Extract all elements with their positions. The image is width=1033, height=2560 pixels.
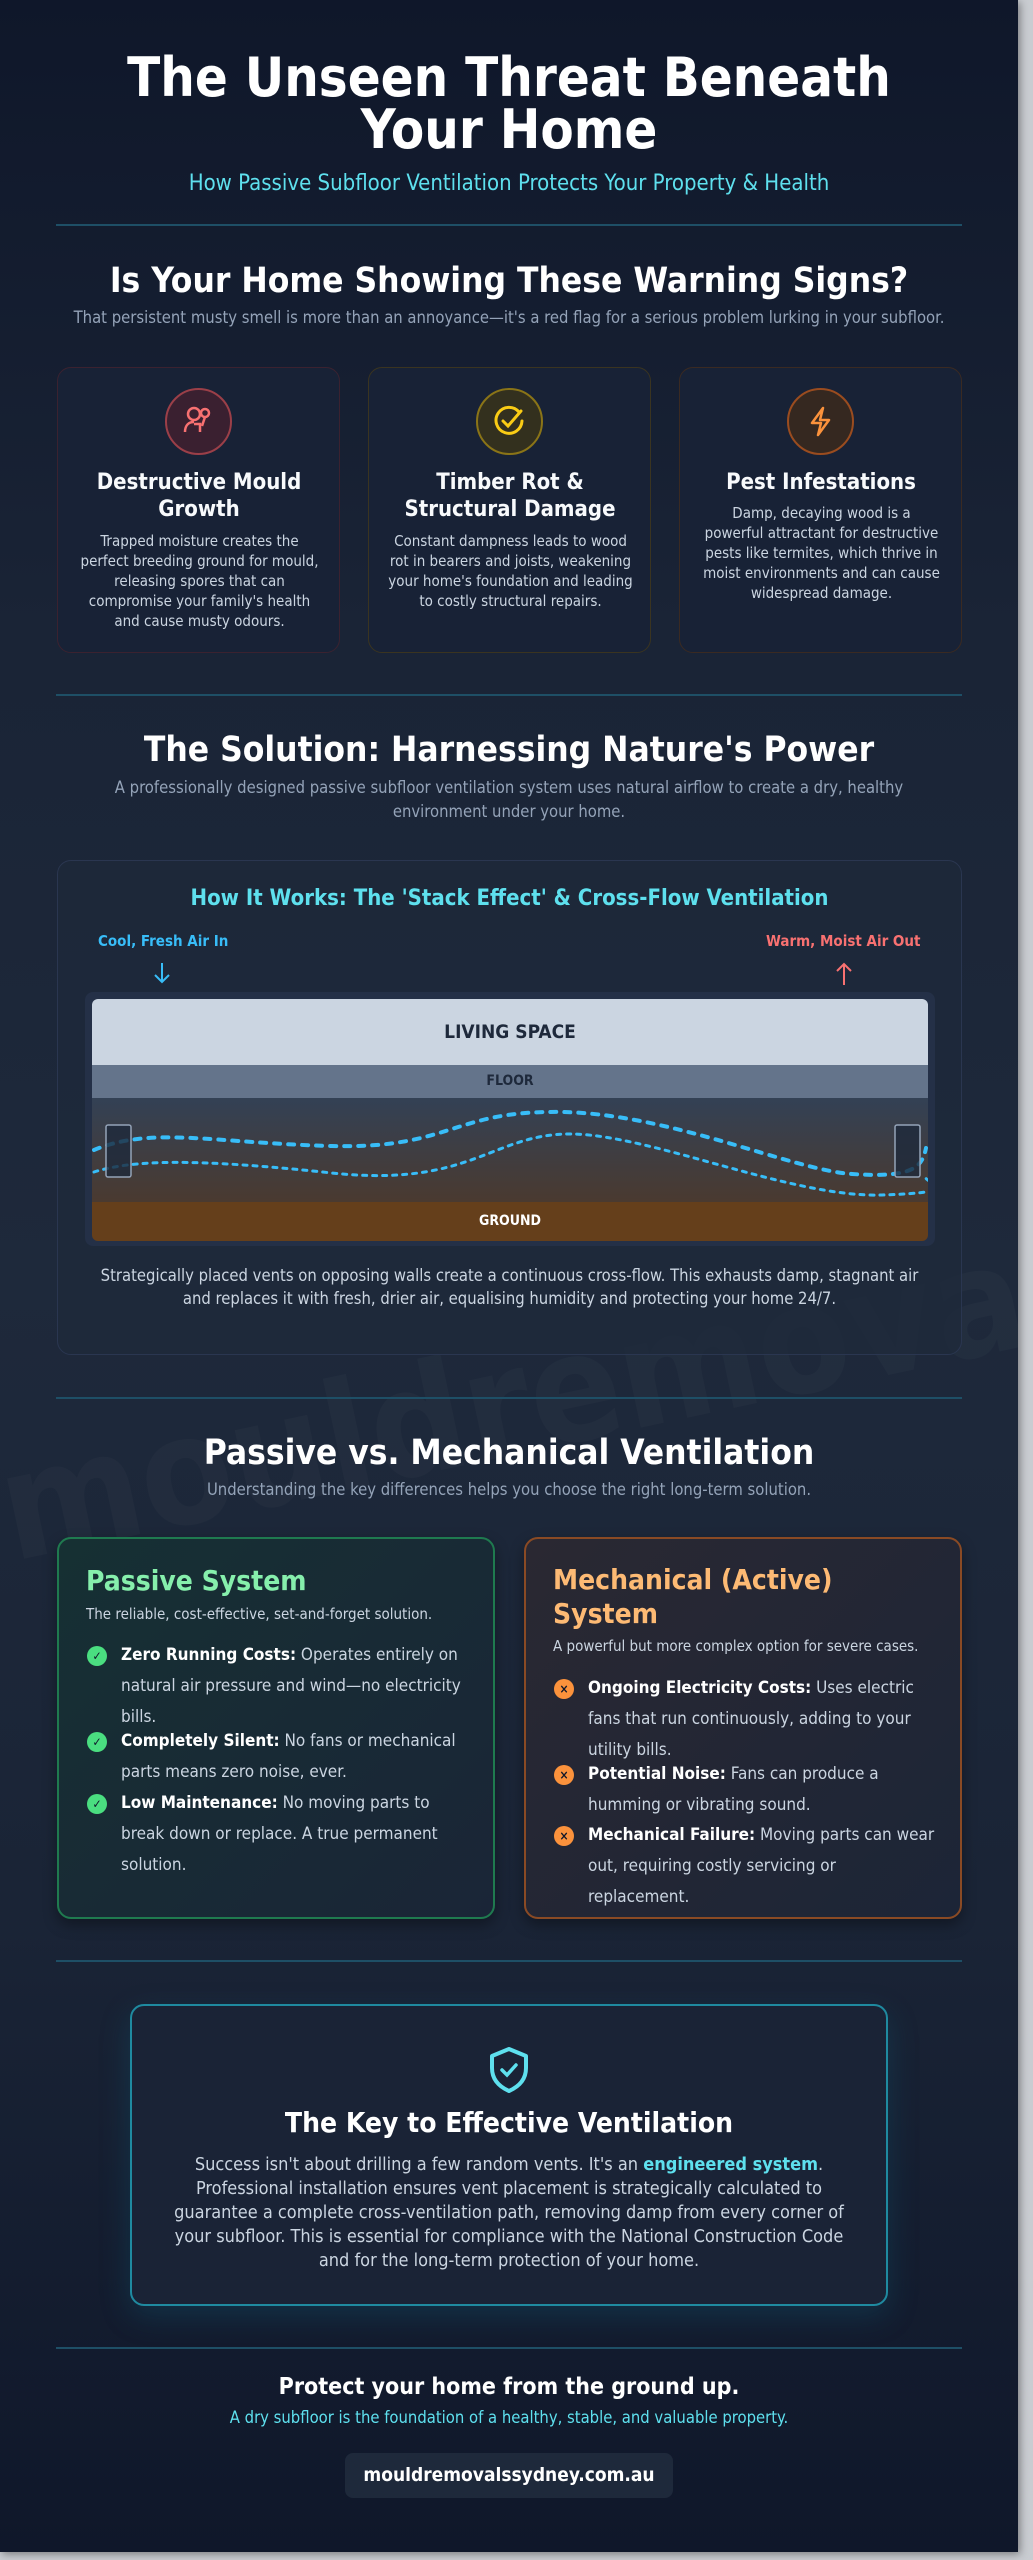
panel: passive [57, 1537, 495, 1919]
list item: ✓ [92, 1797, 102, 1811]
icon: check [476, 388, 543, 455]
text: Success isn't about drilling a few random vents. It's an engineered system. Professional installation ensures vent placement is strategically calculated to guarantee a complete cross-ventilation path, removing damp from every corner of your subfloor. This is essential for compliance with the National Construction Code and for the long-term protection of your home. [174, 2154, 844, 2271]
list item: Potential Noise: Fans can produce a humming or vibrating sound. [588, 1764, 879, 1815]
list item: Completely Silent: No fans or mechanical parts means zero noise, ever. [121, 1731, 456, 1782]
icon: bolt [787, 388, 854, 455]
heading: Timber Rot & Structural Damage [404, 470, 616, 522]
title: The Unseen Threat Beneath [127, 46, 891, 109]
subfloor [92, 1098, 928, 1202]
label: warm air out: Warm, Moist Air Out [766, 932, 920, 950]
floor [92, 1065, 928, 1098]
heading: Passive System [86, 1564, 307, 1597]
heading: Destructive Mould Growth [97, 470, 301, 522]
solution intro: A professionally designed passive subfloor ventilation system uses natural airflow to create a dry, healthy environment under your home. [115, 778, 903, 821]
footer url button [345, 2453, 673, 2498]
panel: key to effective ventilation [130, 2004, 888, 2306]
text: Damp, decaying wood is a powerful attractant for destructive pests like termites, which thrive in moist environments and can cause widespread damage. [703, 504, 940, 602]
ground: GROUND [479, 1213, 541, 1229]
heading: Mechanical (Active) System [553, 1563, 833, 1630]
floor: FLOOR [486, 1073, 534, 1089]
icon: mould [165, 388, 232, 455]
panel: mechanical [524, 1537, 962, 1919]
heading: passive vs mechanical: Passive vs. Mechanical Ventilation [204, 1433, 814, 1473]
subtitle: A powerful but more complex option for severe cases. [553, 1637, 918, 1655]
list item: ✓ [92, 1649, 102, 1663]
description: Strategically placed vents on opposing walls create a continuous cross-flow. This exhausts damp, stagnant air and replaces it with fresh, drier air, equalising humidity and protecting your home 24/7. [101, 1266, 918, 1308]
heading: How It Works: The 'Stack Effect' & Cross-Flow Ventilation [190, 886, 828, 911]
list item: × [559, 1829, 569, 1843]
card: mould [57, 367, 340, 653]
intro text: That persistent musty smell is more than an annoyance—it's a red flag for a serious problem lurking in your subfloor. [74, 308, 944, 327]
text: Constant dampness leads to wood rot in bearers and joists, weakening your home's foundation and leading to costly structural repairs. [388, 532, 633, 610]
list item: Ongoing Electricity Costs: Uses electric fans that run continuously, adding to your utility bills. [588, 1678, 914, 1760]
living space [92, 999, 928, 1065]
list item: × [559, 1768, 569, 1782]
arrow down [154, 963, 170, 984]
text: Trapped moisture creates the perfect breeding ground for mould, releasing spores that can compromise your family's health and cause musty odours. [80, 532, 318, 630]
heading: The Key to Effective Ventilation [285, 2106, 733, 2139]
label: cool air in: Cool, Fresh Air In [98, 932, 228, 950]
list item: Low Maintenance: No moving parts to break down or replace. A true permanent solution. [121, 1793, 438, 1875]
footer subtitle: A dry subfloor is the foundation of a healthy, stable, and valuable property. [230, 2408, 788, 2427]
heading: solution: The Solution: Harnessing Nature's Power [144, 730, 874, 770]
panel: how it works [57, 860, 962, 1355]
list item: Mechanical Failure: Moving parts can wear out, requiring costly servicing or replacement. [588, 1825, 934, 1907]
arrow up [836, 962, 852, 985]
list item: ✓ [92, 1735, 102, 1749]
card: timber rot [368, 367, 651, 653]
subtitle: How Passive Subfloor Ventilation Protects Your Property & Health [189, 171, 829, 196]
footer heading: Protect your home from the ground up. [279, 2374, 739, 2400]
title: Your Home [361, 98, 657, 161]
heading: Pest Infestations [726, 470, 916, 495]
icon: shield [490, 2047, 528, 2093]
footer url button: mouldremovalssydney.com.au [363, 2464, 655, 2486]
diagram [85, 992, 935, 1246]
subtitle: The reliable, cost-effective, set-and-forget solution. [86, 1605, 432, 1623]
heading: warning signs: Is Your Home Showing These Warning Signs? [110, 261, 908, 301]
ground [92, 1202, 928, 1241]
comparison intro: Understanding the key differences helps you choose the right long-term solution. [207, 1480, 811, 1499]
card: pests [679, 367, 962, 653]
list item: Zero Running Costs: Operates entirely on natural air pressure and wind—no electricity bills. [121, 1645, 461, 1727]
title [127, 46, 891, 161]
living space: LIVING SPACE [444, 1021, 576, 1043]
airflow [92, 1110, 928, 1197]
list item: × [559, 1682, 569, 1696]
